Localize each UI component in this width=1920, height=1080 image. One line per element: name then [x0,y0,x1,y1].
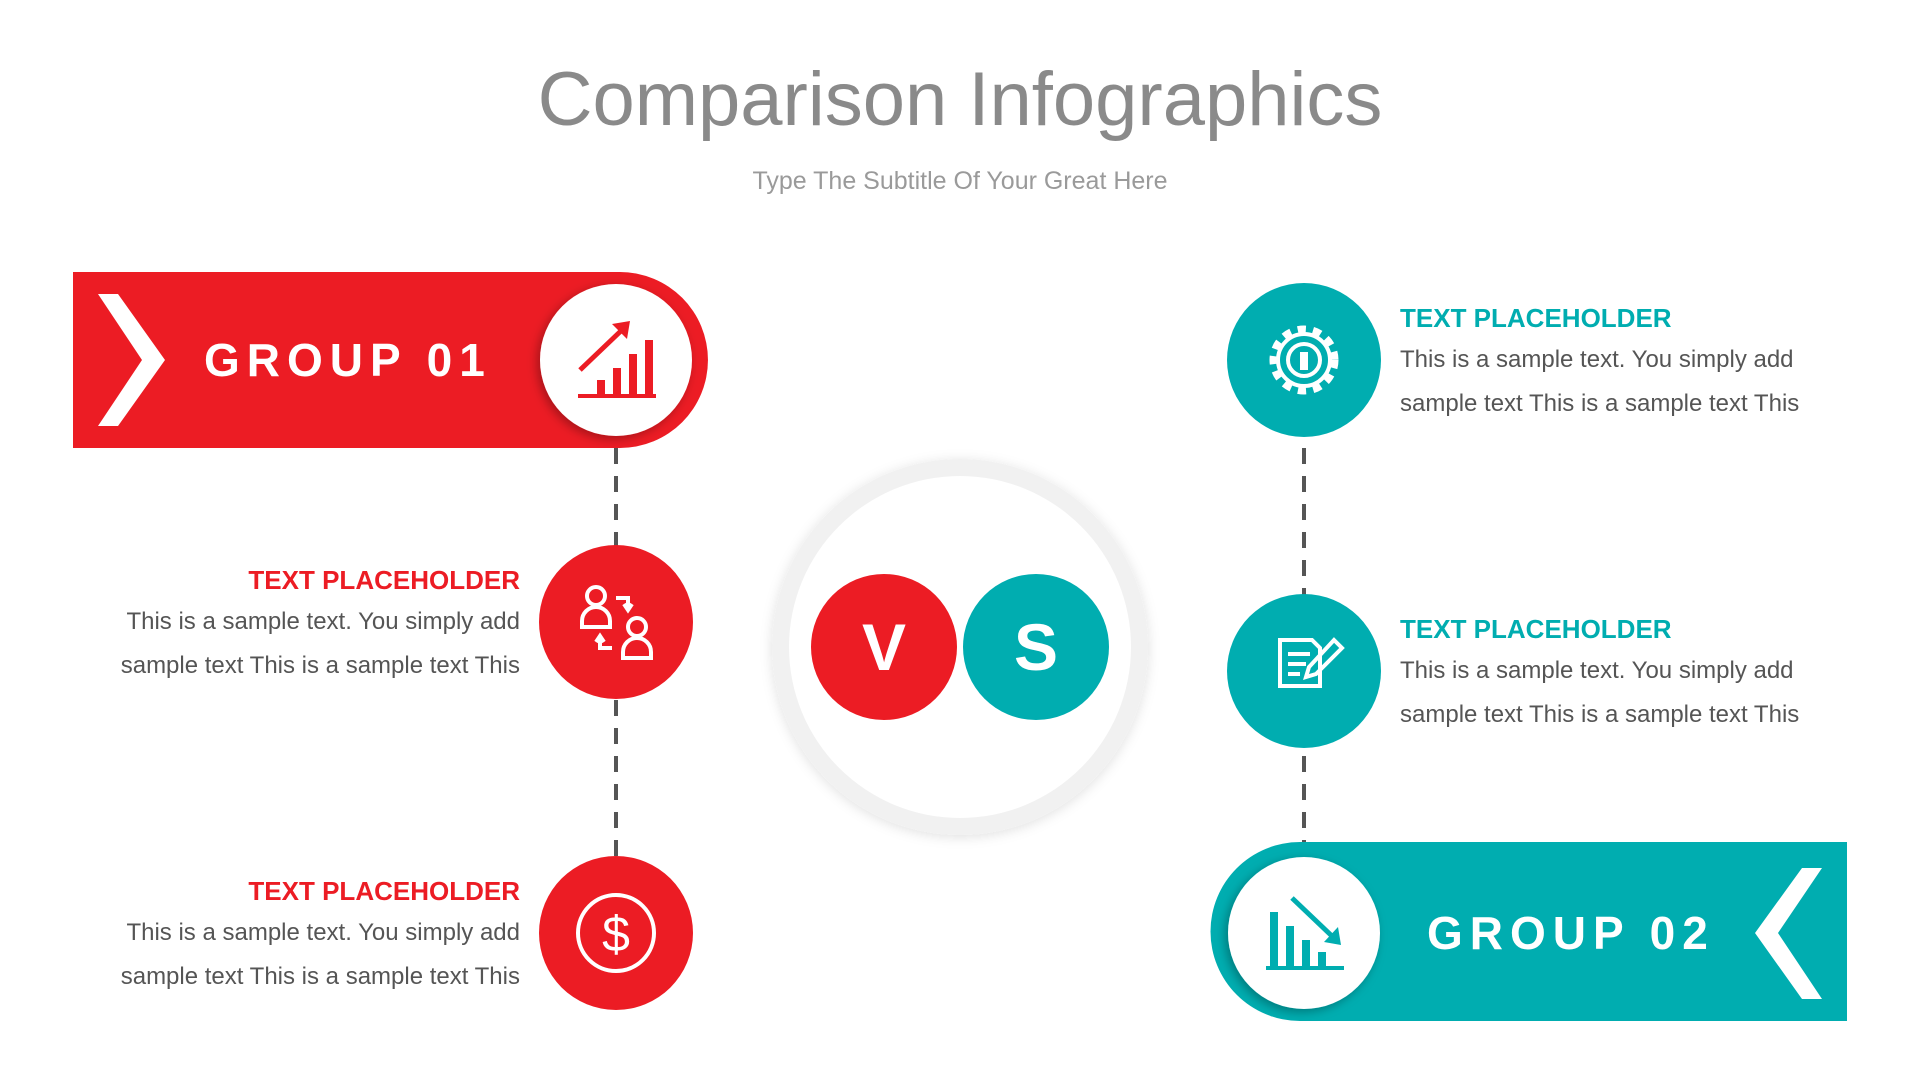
icon circle: document edit [1227,594,1381,748]
text block: right 2 [1400,614,1799,728]
text block: right 1: This is a sample text. You simply add [1400,346,1794,373]
text block: left 1: sample text This is a sample text This [121,652,520,679]
icon circle: dollar [539,856,693,1010]
text block: right 1 [1400,303,1799,417]
icon circle: people exchange [539,545,693,699]
text block: left 1: TEXT PLACEHOLDER [248,565,520,595]
text block: right 2: This is a sample text. You simply add [1400,657,1794,684]
banner: group 01: GROUP 01 [204,334,492,386]
text block: right 2: TEXT PLACEHOLDER [1400,614,1672,644]
text block: right 2: sample text This is a sample text This [1400,701,1799,728]
text block: left 2: sample text This is a sample text This [121,963,520,990]
vs badge [772,459,1148,835]
text block: left 1 [121,565,520,679]
banner: group 02: GROUP 02 [1427,907,1715,959]
banner: group 02 [1210,842,1847,1021]
icon circle: dollar: $ [602,906,630,962]
text block: left 2: This is a sample text. You simply add [126,919,520,946]
icon circle: gear [1227,283,1381,437]
icon: declining chart [1266,898,1344,970]
text block: right 1: TEXT PLACEHOLDER [1400,303,1672,333]
text block: left 2: TEXT PLACEHOLDER [248,876,520,906]
text block: left 2 [121,876,520,990]
vs badge: S [1014,610,1058,684]
title: Comparison Infographics [538,57,1382,142]
banner: group 01 [73,272,708,448]
icon: growth chart [578,321,656,398]
vs badge: V [862,610,906,684]
subtitle: Type The Subtitle Of Your Great Here [752,167,1168,195]
text block: right 1: sample text This is a sample text This [1400,390,1799,417]
text block: left 1: This is a sample text. You simply add [126,608,520,635]
